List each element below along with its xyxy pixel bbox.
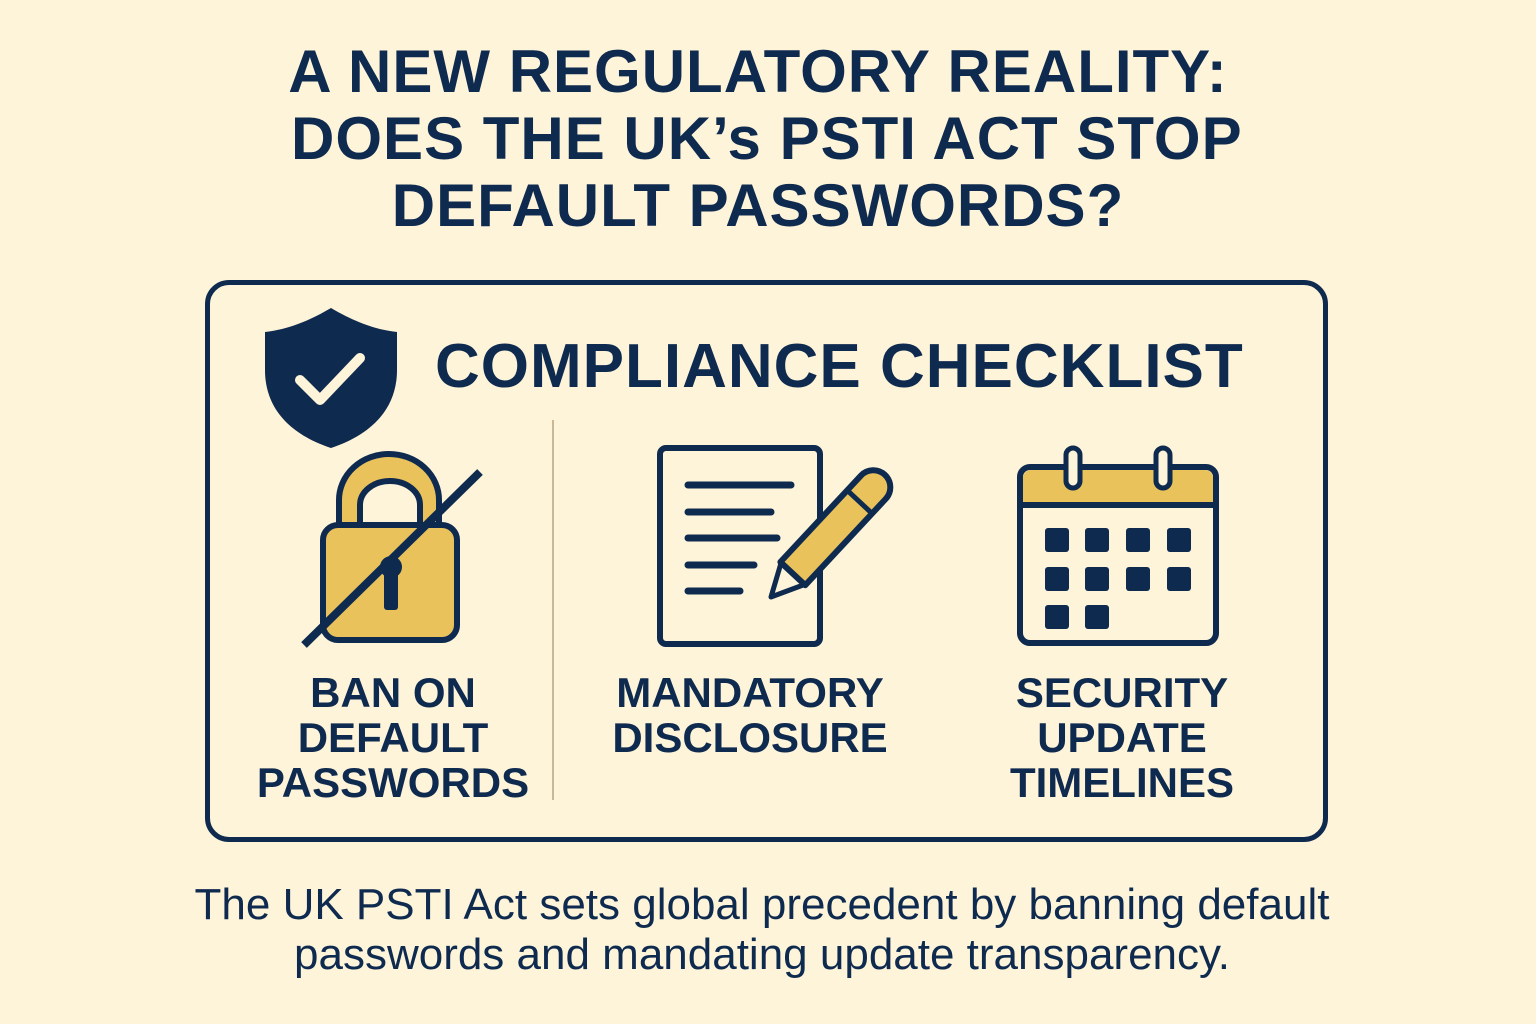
title: DEFAULT PASSWORDS?	[392, 172, 1124, 239]
title	[288, 38, 1243, 239]
label: ban on default passwords: DEFAULT	[298, 714, 488, 761]
label: ban on default passwords: BAN ON	[310, 669, 476, 716]
label: security update timelines: TIMELINES	[1010, 759, 1234, 806]
label: mandatory disclosure	[612, 669, 888, 761]
label: mandatory disclosure: MANDATORY	[616, 669, 884, 716]
title: DOES THE UK’s PSTI ACT STOP	[291, 105, 1243, 172]
label: ban on default passwords: PASSWORDS	[257, 759, 529, 806]
icon: document with pencil	[660, 448, 897, 644]
icon: lock with slash	[304, 454, 480, 645]
label: security update timelines: UPDATE	[1037, 714, 1207, 761]
label: mandatory disclosure: DISCLOSURE	[612, 714, 888, 761]
icon: shield	[265, 308, 397, 448]
label: security update timelines	[1010, 669, 1234, 806]
label: ban on default passwords	[257, 669, 529, 806]
footer text: passwords and mandating update transparency.	[294, 930, 1230, 979]
footer text	[195, 880, 1330, 979]
footer text: The UK PSTI Act sets global precedent by banning default	[195, 880, 1329, 929]
label: security update timelines: SECURITY	[1016, 669, 1228, 716]
title: A NEW REGULATORY REALITY:	[288, 38, 1228, 105]
panel: compliance checklist	[205, 280, 1328, 842]
heading: COMPLIANCE CHECKLIST	[435, 332, 1244, 401]
icon: calendar	[1020, 448, 1216, 643]
